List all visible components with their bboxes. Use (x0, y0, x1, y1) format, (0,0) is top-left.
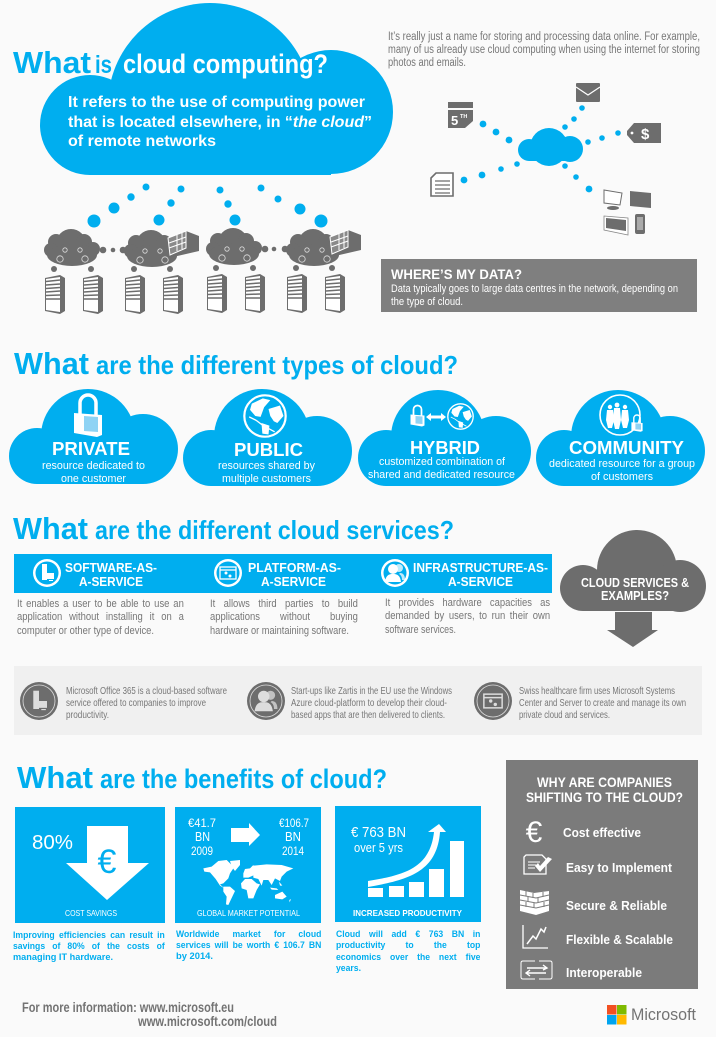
text block: market description: services will be worth € 106.7 BN (176, 939, 321, 950)
callout: gray cloud with arrow (560, 530, 706, 647)
heading: cloud services: What (13, 511, 88, 546)
icon: calendar (448, 102, 473, 128)
panel: public cloud: resources shared by (218, 460, 315, 472)
panel: increased productivity: € 763 BN (351, 824, 406, 841)
service: infrastructure as a service: A-SERVICE (448, 575, 513, 589)
blue dots (461, 105, 621, 192)
reason: flexible and scalable (523, 925, 673, 948)
reason: cost effective: € (526, 816, 543, 849)
example: Zartis on Windows Azure: Start-ups like Zartis in the EU use the Windows (291, 685, 452, 697)
diagram: cloud connected to devices (431, 83, 661, 235)
panel: private cloud: resource dedicated to (42, 460, 145, 472)
example: Microsoft Office 365: productivity. (66, 709, 109, 721)
text block: platform as a service description: hardware or maintaining software. (210, 625, 349, 637)
definition text: of remote networks (68, 133, 216, 150)
text block: market description: by 2014. (176, 950, 213, 961)
world map (203, 860, 293, 905)
heading: cloud services: are the different cloud services? (95, 515, 454, 545)
callout: gray cloud with arrow: CLOUD SERVICES & (581, 575, 689, 590)
service: platform as a service: PLATFORM-AS- (248, 561, 341, 575)
reason: cost effective: Cost effective (563, 825, 641, 840)
panel: private cloud (9, 389, 178, 485)
panel: private cloud: one customer (61, 473, 126, 485)
icon: document (431, 173, 453, 196)
text block: intro explanation: photos and emails. (388, 57, 466, 69)
text block: software as a service description: application without installing it on a (17, 611, 184, 623)
panel: cost savings: € (98, 843, 117, 881)
reason: secure and reliable (520, 890, 667, 915)
text block: platform as a service description (210, 598, 358, 637)
panel: global market potential: BN (195, 830, 210, 844)
example: Zartis on Windows Azure: Azure cloud-platform to develop their cloud- (291, 697, 447, 709)
text block: cost savings description: Improving efficiencies can result in (13, 929, 165, 940)
panel: community cloud (536, 390, 705, 486)
title (13, 45, 328, 80)
title: cloud computing? (123, 49, 328, 79)
text block: software as a service description: It enables a user to be able to use an (17, 598, 184, 610)
panel: why are companies shifting to the cloud (506, 760, 698, 989)
example: Zartis on Windows Azure: based apps that are then delivered to clients. (291, 709, 445, 721)
icon: padlock (74, 395, 102, 437)
example: Microsoft Office 365: service offered to companies to improve (66, 697, 206, 709)
panel: increased productivity: INCREASED PRODUCTIVITY (353, 908, 462, 918)
text block: infrastructure as a service description: demanded by users, to run their own (385, 610, 550, 622)
panel: hybrid cloud: shared and dedicated resource (368, 469, 515, 481)
text block: cost savings description: savings of 80% of the costs of (13, 940, 165, 951)
panel: increased productivity: over 5 yrs (354, 841, 403, 855)
icon: envelope (576, 83, 600, 102)
panel: cost savings: 80% (32, 832, 73, 854)
reason: interoperable: Interoperable (566, 965, 642, 980)
example: Microsoft Office 365 (20, 682, 227, 721)
panel: community cloud: dedicated resource for a group (549, 458, 695, 470)
footer: more information links: www.microsoft.com/cloud (137, 1013, 277, 1029)
panel: community cloud: COMMUNITY (569, 438, 684, 458)
service: infrastructure as a service (381, 559, 548, 589)
reason: secure and reliable: Secure & Reliable (566, 898, 667, 913)
definition text: It refers to the use of computing power (68, 94, 365, 111)
callout: where's my data: the type of cloud. (391, 296, 463, 308)
reason: interoperable (521, 961, 642, 980)
title: is (95, 51, 112, 79)
service: platform as a service (214, 559, 341, 589)
service: platform as a service: A-SERVICE (261, 575, 326, 589)
panel: why are companies shifting to the cloud: SHIFTING TO THE CLOUD? (526, 790, 683, 805)
footer: more information links (22, 999, 277, 1029)
icon: price tag (627, 123, 661, 143)
text block: infrastructure as a service description: It provides hardware capacities as (385, 597, 550, 609)
panel: hybrid cloud (358, 390, 531, 486)
panel: increased productivity (335, 806, 481, 922)
callout: gray cloud with arrow: EXAMPLES? (601, 588, 669, 603)
text block: productivity description (336, 928, 480, 973)
panel: public cloud: multiple customers (222, 473, 311, 485)
example: Swiss healthcare firm: private cloud and services. (519, 709, 610, 721)
panel: hybrid cloud: customized combination of (379, 456, 506, 468)
panel: global market potential (175, 807, 321, 923)
panel: global market potential: GLOBAL MARKET POTENTIAL (197, 908, 300, 918)
callout: where's my data: WHERE’S MY DATA? (391, 266, 522, 282)
service: infrastructure as a service: INFRASTRUCTURE-AS- (413, 561, 548, 575)
text block: market description: Worldwide market for cloud (176, 928, 321, 939)
reason: flexible and scalable: Flexible & Scalable (566, 932, 673, 947)
definition text: that is located elsewhere, in “ the cloud” (68, 114, 372, 131)
connecting blue dots (88, 184, 328, 228)
panel: service examples (14, 666, 702, 735)
panel: hybrid cloud: HYBRID (410, 438, 480, 458)
panel: global market potential: 2009 (191, 844, 213, 858)
text block: productivity description: economics over the next five (336, 951, 480, 962)
service: software as a service: A-SERVICE (79, 575, 143, 589)
panel: community cloud: of customers (591, 471, 653, 483)
icon: price tag: $ (641, 126, 650, 143)
icon: calendar: TH (460, 114, 467, 120)
panel: global market potential: BN (285, 830, 301, 844)
arrow: down (607, 612, 658, 647)
text block: infrastructure as a service description (385, 597, 550, 636)
icon: devices (604, 190, 651, 235)
reason: easy to implement (524, 855, 673, 875)
icon: globe (244, 395, 286, 437)
panel: global market potential: €41.7 (188, 816, 216, 830)
example: Zartis on Windows Azure (247, 682, 452, 721)
text block: cost savings description (13, 929, 165, 962)
panel: why are companies shifting to the cloud: WHY ARE COMPANIES (537, 775, 672, 790)
heading: benefits of cloud: What (17, 760, 93, 795)
panel: cost savings (15, 807, 165, 923)
text block: software as a service description (17, 598, 184, 637)
icon: calendar: 5 (451, 113, 458, 128)
reason: easy to implement: Easy to Implement (566, 860, 673, 875)
logo: Microsoft (607, 1005, 696, 1024)
heading: types of cloud: What (14, 346, 89, 381)
bar chart with rising arrow (368, 824, 464, 897)
icon: people in ring with lock (600, 395, 643, 435)
panel: global market potential: €106.7 (279, 816, 309, 830)
text block: market description (176, 928, 321, 961)
example: Microsoft Office 365: Microsoft Office 365 is a cloud-based software (66, 685, 227, 697)
text block: productivity description: productivity to the top (336, 939, 480, 950)
panel: what is cloud computing (13, 3, 393, 314)
service: software as a service: SOFTWARE-AS- (65, 561, 157, 575)
network of small clouds and servers (44, 228, 361, 314)
panel: public cloud (183, 389, 352, 486)
icon: lock and globe exchange (410, 404, 473, 429)
title: What (13, 45, 91, 80)
example: Swiss healthcare firm (474, 682, 686, 721)
heading: benefits of cloud (17, 760, 387, 795)
panel: service types band (14, 554, 552, 593)
text block: productivity description: Cloud will add € 763 BN in (336, 928, 480, 939)
heading: types of cloud (14, 346, 458, 381)
panel: private cloud: PRIVATE (52, 439, 130, 459)
text block: platform as a service description: It allows third parties to build (210, 598, 358, 610)
heading: benefits of cloud: are the benefits of cloud? (100, 764, 387, 794)
text block: intro explanation (388, 31, 700, 69)
main blue cloud (40, 3, 393, 175)
text block: productivity description: years. (336, 962, 361, 973)
small blue cloud (518, 128, 583, 166)
arrow: growth (231, 823, 260, 846)
heading: cloud services (13, 511, 454, 546)
panel: cost savings: COST SAVINGS (65, 908, 117, 918)
panel: global market potential: 2014 (282, 844, 304, 858)
definition text (68, 94, 372, 150)
text block: software as a service description: computer or other type of device. (17, 625, 154, 637)
callout: where's my data (381, 259, 697, 312)
heading: types of cloud: are the different types of cloud? (96, 350, 458, 380)
service: software as a service (33, 559, 157, 589)
arrow: down with euro (66, 826, 149, 900)
reason: cost effective (526, 816, 641, 849)
text block: infrastructure as a service description: software services. (385, 624, 456, 636)
logo: Microsoft: Microsoft (631, 1006, 696, 1024)
panel: public cloud: PUBLIC (234, 440, 303, 460)
footer: more information links: For more information: www.microsoft.eu (22, 999, 234, 1015)
text block: platform as a service description: applications without buying (210, 611, 358, 623)
text block: cost savings description: managing IT hardware. (13, 951, 113, 962)
